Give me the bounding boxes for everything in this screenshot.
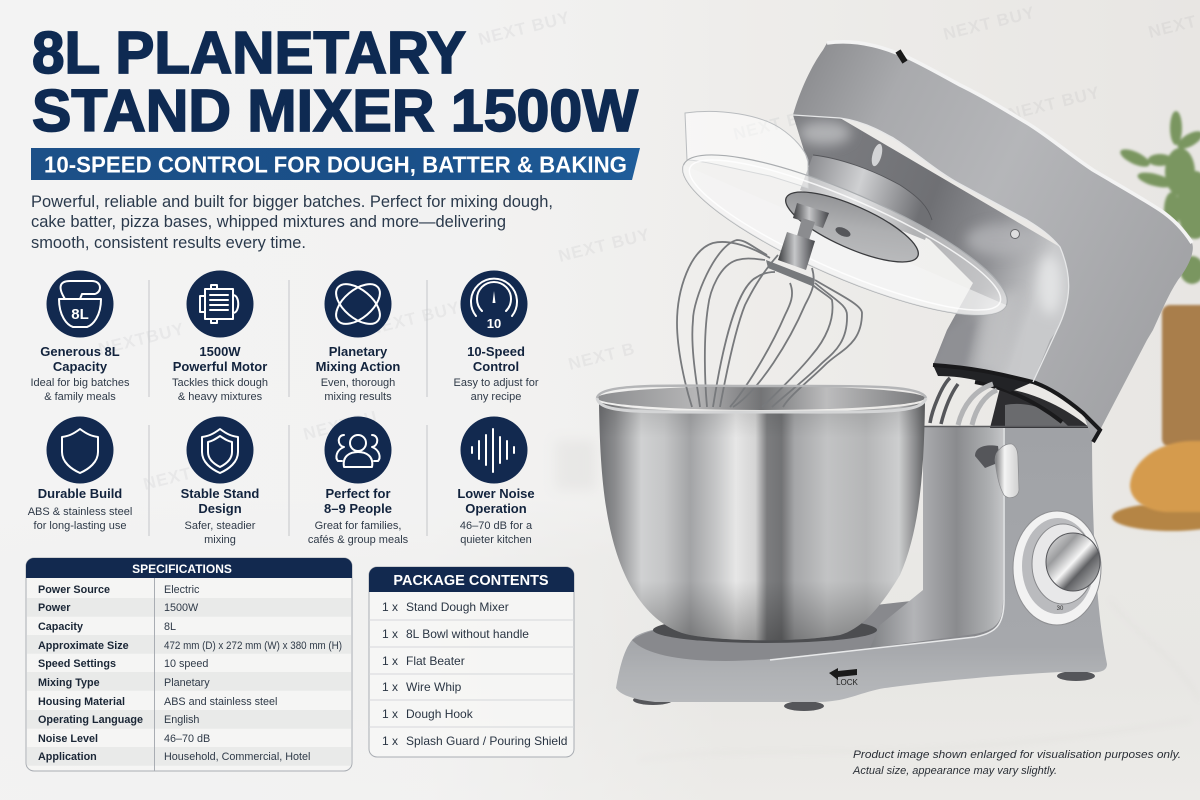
watermarks: NEXT (141, 464, 194, 494)
specification rows: 8L (164, 621, 176, 633)
feature: people: 8–9 People (324, 501, 392, 516)
feature: people (308, 416, 409, 546)
feature: people: Perfect for (325, 486, 391, 501)
mixer feet (633, 671, 1095, 711)
feature: motor: & heavy mixtures (178, 391, 263, 403)
front hub collar (800, 155, 932, 240)
pivot pin (869, 142, 885, 168)
base top plate (632, 600, 1004, 661)
icon: sound wave (460, 416, 528, 484)
feature: people: cafés & group meals (308, 534, 409, 546)
feature: capacity: & family meals (44, 391, 116, 403)
feature: motor: Tackles thick dough (172, 377, 268, 389)
specification rows: 472 mm (D) x 272 mm (W) x 380 mm (H) (164, 640, 342, 652)
bright edge lines (793, 115, 1069, 382)
package items: Flat Beater (406, 654, 465, 668)
subtitle banner: 10-SPEED CONTROL FOR DOUGH, BATTER & BAKING (44, 152, 627, 178)
bowl back ring (653, 617, 877, 643)
bread board (1112, 503, 1200, 531)
feature: capacity (30, 270, 130, 403)
intro paragraph: smooth, consistent results every time. (31, 234, 306, 252)
watermarks: NEXT BUY (556, 225, 652, 266)
feature: noise: Operation (465, 501, 527, 516)
icon: double shield (186, 416, 254, 484)
specification rows: Planetary (164, 677, 210, 689)
specification rows: Application (38, 751, 97, 763)
speed dial (1013, 511, 1101, 625)
feature: planetary: Even, thorough (321, 377, 395, 389)
feature: speed: Control (473, 359, 519, 374)
feature: capacity: Capacity (53, 359, 108, 374)
feature: noise: quieter kitchen (460, 534, 532, 546)
specification rows: Power Source (38, 584, 110, 596)
package items: 8L Bowl without handle (406, 627, 529, 641)
title: STAND MIXER 1500W (32, 78, 638, 144)
specification rows: 46–70 dB (164, 733, 210, 745)
specification rows: English (164, 714, 199, 726)
watermarks: NEXT BUY (731, 103, 827, 144)
feature: planetary (316, 270, 400, 403)
feature: durable: Durable Build (38, 486, 122, 501)
package items (382, 600, 567, 748)
specification rows: 10 speed (164, 658, 208, 670)
intro paragraph: Powerful, reliable and built for bigger batches. Perfect for mixing dough, (31, 193, 553, 211)
watermarks: NEXTBUY (96, 319, 187, 359)
splash guard (667, 111, 1023, 344)
speed dial: 30 (1057, 606, 1064, 612)
specification rows: 1500W (164, 602, 199, 614)
head underside and hinges (923, 365, 1092, 428)
feature: speed: any recipe (471, 391, 521, 403)
icon: bowl 8L: 8L (71, 306, 89, 323)
watermarks: NEXT BUY (476, 8, 572, 49)
feature: planetary: mixing results (324, 391, 392, 403)
housing shading (799, 121, 1062, 372)
package items: 1 x (382, 734, 398, 748)
watermarks: NEXT BUY (366, 298, 462, 339)
product illustration: stand mixer (597, 42, 1193, 711)
feature: stable: Safer, steadier (185, 520, 256, 532)
watermarks (96, 1, 1200, 494)
feature: durable: ABS & stainless steel (28, 506, 132, 518)
stand column and base (616, 426, 1107, 702)
feature: noise: 46–70 dB for a (460, 520, 533, 532)
specification rows: Noise Level (38, 733, 98, 745)
bread (1130, 441, 1200, 512)
chrome top band (827, 42, 1192, 243)
specification rows: ABS and stainless steel (164, 696, 277, 708)
package items: 1 x (382, 654, 398, 668)
title (32, 20, 638, 144)
package items: 1 x (382, 600, 398, 614)
bowl lock lever (975, 444, 1019, 498)
feature grid (28, 270, 539, 546)
title: 8L PLANETARY (32, 20, 466, 86)
specification rows: Housing Material (38, 696, 125, 708)
upper head body (793, 42, 1193, 442)
bowl interior (597, 386, 925, 410)
specification rows: Speed Settings (38, 658, 116, 670)
feature: motor: Powerful Motor (173, 359, 267, 374)
stainless steel bowl (597, 386, 926, 640)
lock arrow label (829, 668, 859, 687)
feature: stable: Stable Stand (181, 486, 259, 501)
feature: planetary: Planetary (329, 344, 388, 359)
watermarks: NEXTBU (301, 407, 380, 444)
specification rows: Approximate Size (38, 640, 129, 652)
icon: speed dial: 10 (487, 316, 501, 331)
specifications heading (26, 558, 352, 578)
feature: speed (454, 270, 539, 403)
column recess (870, 427, 1003, 648)
specification rows (38, 584, 342, 763)
feature: stable (181, 416, 259, 546)
feature: motor (172, 270, 268, 403)
whisk shaft and collar (766, 203, 829, 286)
package items: Stand Dough Mixer (406, 600, 509, 614)
wire whisk (677, 240, 862, 407)
watermarks: NEXT BUY (1006, 83, 1102, 124)
footnote: Product image shown enlarged for visualisation purposes only. (853, 749, 1181, 761)
specification rows: Household, Commercial, Hotel (164, 751, 310, 763)
intro paragraph (31, 193, 553, 252)
icon: orbit (324, 270, 392, 338)
package items: Dough Hook (406, 707, 474, 721)
watermarks: NEXT BUY (941, 3, 1037, 44)
lower head housing (793, 115, 1069, 382)
package items: 1 x (382, 627, 398, 641)
package items: Splash Guard / Pouring Shield (406, 734, 567, 748)
feature: capacity: Ideal for big batches (30, 377, 130, 389)
panel: specifications table (26, 558, 352, 771)
package items: 1 x (382, 680, 398, 694)
panel: package contents (369, 567, 574, 757)
feature: noise (457, 416, 535, 546)
feature: capacity: Generous 8L (40, 344, 120, 359)
plant (1118, 111, 1200, 284)
lock arrow label: LOCK (836, 678, 859, 687)
specification rows: Capacity (38, 621, 83, 633)
specification rows: Operating Language (38, 714, 143, 726)
background props: plant, cutting board and bread (1112, 111, 1200, 531)
icon: people (324, 416, 392, 484)
feature: stable: Design (198, 501, 242, 516)
feature: motor: 1500W (199, 344, 241, 359)
specification rows: Mixing Type (38, 677, 100, 689)
feature: planetary: Mixing Action (316, 359, 400, 374)
specification rows: Power (38, 602, 71, 614)
feature: noise: Lower Noise (457, 486, 535, 501)
package contents heading: PACKAGE CONTENTS (393, 573, 549, 589)
package items: 1 x (382, 707, 398, 721)
specification rows: Electric (164, 584, 200, 596)
feature: speed: Easy to adjust for (454, 377, 539, 389)
icon: motor (186, 270, 254, 338)
package items: Wire Whip (406, 680, 462, 694)
icon: shield (46, 416, 114, 484)
feature: durable (28, 416, 132, 532)
feature: durable: for long-lasting use (34, 520, 126, 532)
footnote (852, 749, 1181, 777)
specifications heading: SPECIFICATIONS (132, 562, 232, 576)
feature: people: Great for families, (315, 520, 401, 532)
cutting board (1162, 305, 1200, 447)
motor head (793, 42, 1193, 442)
footnote: Actual size, appearance may vary slightly. (852, 765, 1057, 777)
feature: stable: mixing (204, 534, 236, 546)
intro paragraph: cake batter, pizza bases, whipped mixtures and more—delivering (31, 213, 506, 231)
feature: speed: 10-Speed (467, 344, 525, 359)
watermarks: NEXT B (566, 339, 637, 374)
package contents heading (369, 567, 574, 592)
black underside rim (933, 365, 1100, 442)
